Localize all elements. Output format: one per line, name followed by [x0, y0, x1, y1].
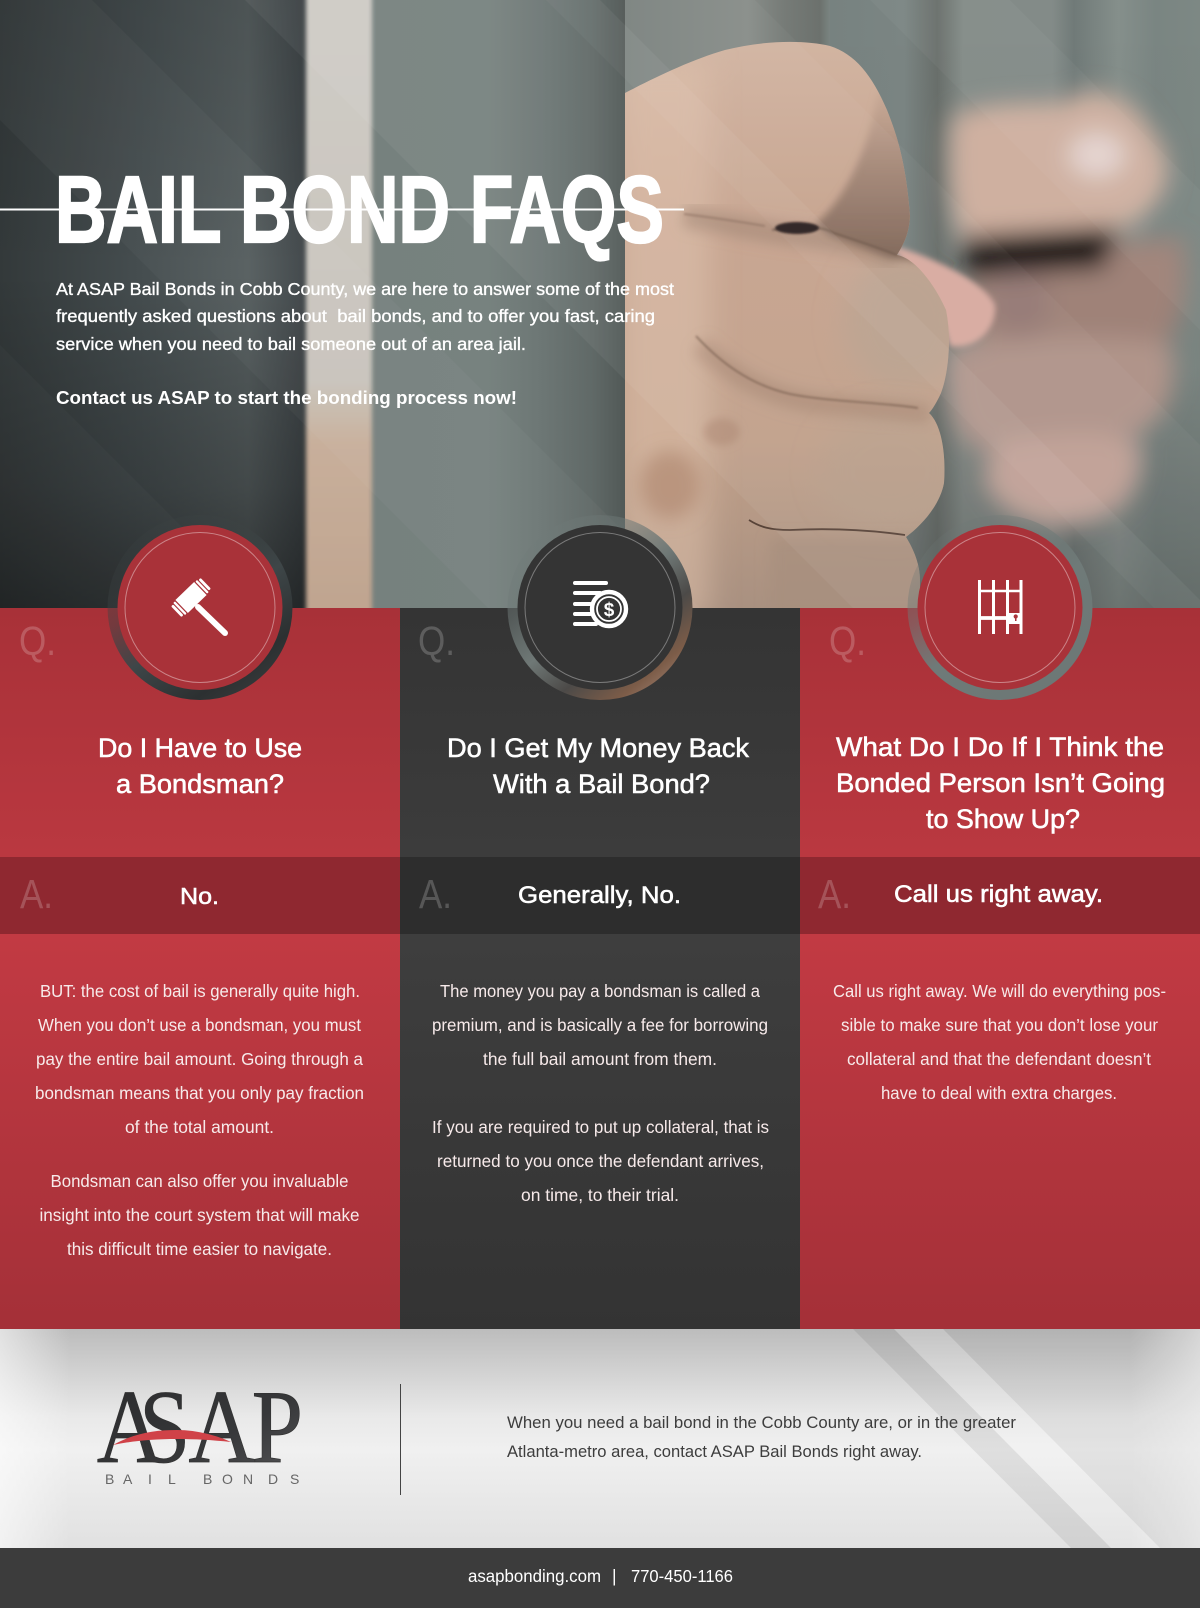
question 1 heading: a Bondsman? [116, 769, 284, 799]
body text column 1: bondsman means that you only pay fraction [35, 1083, 364, 1103]
body text column 2: on time, to their trial. [521, 1185, 679, 1205]
intro text: At ASAP Bail Bonds in Cobb County, we are here to answer some of the most [56, 279, 674, 299]
footer statement: When you need a bail bond in the Cobb County are, or in the greater [507, 1413, 1016, 1432]
call to action: Contact us ASAP to start the bonding process now! [56, 388, 517, 408]
question 2 heading [447, 733, 750, 799]
logo: ASAP Bail Bonds: A [188, 1370, 255, 1485]
contact bar: asapbonding.com [468, 1566, 601, 1586]
panel: question 1 [0, 608, 400, 1329]
answer band 1 [0, 857, 400, 934]
panel: question 3 [800, 608, 1200, 1329]
contact bar [0, 1548, 1200, 1608]
question 3 heading [836, 732, 1165, 834]
Q marks [19, 618, 866, 664]
A marks: A. [20, 871, 53, 917]
icon: jail cell door [979, 580, 1022, 634]
body text column 1: this difficult time easier to navigate. [67, 1239, 332, 1259]
logo tagline: L [168, 1471, 176, 1487]
question 3 heading: Bonded Person Isn’t Going [836, 768, 1165, 798]
body text column 1 [35, 981, 364, 1259]
icon badge: gavel [108, 515, 292, 700]
body text column 2: If you are required to put up collateral, that is [432, 1117, 769, 1137]
icon: stack of coins: $ [604, 600, 615, 621]
intro text: service when you need to bail someone out of an area jail. [56, 334, 526, 354]
question 2 heading: With a Bail Bond? [493, 769, 710, 799]
body text column 3: Call us right away. We will do everything pos- [833, 981, 1166, 1001]
body text column 1: Bondsman can also offer you invaluable [50, 1171, 348, 1191]
intro text: frequently asked questions about bail bonds, and to offer you fast, caring [56, 306, 655, 326]
answer body background 2 [400, 934, 800, 1329]
logo: ASAP Bail Bonds: S [139, 1370, 190, 1485]
body text column 1: When you don’t use a bondsman, you must [38, 1015, 361, 1035]
logo: ASAP Bail Bonds [97, 1370, 303, 1487]
vertical divider [400, 1384, 401, 1495]
logo tagline: A [123, 1471, 133, 1487]
logo: ASAP Bail Bonds: A [97, 1370, 164, 1485]
blurred far hand [948, 92, 1186, 526]
logo tagline: N [243, 1471, 253, 1487]
body text column 1: BUT: the cost of bail is generally quite high. [40, 981, 360, 1001]
body text column 3 [833, 981, 1166, 1103]
Q marks: Q. [19, 618, 56, 664]
footer statement: Atlanta-metro area, contact ASAP Bail Bonds right away. [507, 1442, 922, 1461]
hero photo: fist gripping jail bars [0, 0, 1200, 654]
logo tagline: I [148, 1471, 152, 1487]
title: BAIL BOND FAQS [55, 157, 664, 263]
body text column 1: insight into the court system that will make [40, 1205, 360, 1225]
question 2 heading: Do I Get My Money Back [447, 733, 750, 763]
answer body background 1 [0, 934, 400, 1329]
body text column 2: returned to you once the defendant arrives, [437, 1151, 764, 1171]
A marks [20, 871, 851, 917]
answer band 3 [800, 857, 1200, 934]
answer 3: Call us right away. [894, 881, 1103, 908]
icon: stack of coins [575, 583, 626, 626]
body text column 3: have to deal with extra charges. [881, 1083, 1117, 1103]
body text column 3: collateral and that the defendant doesn’t [847, 1049, 1151, 1069]
answer 2: Generally, No. [518, 882, 681, 909]
Q marks: Q. [829, 618, 866, 664]
Q marks: Q. [418, 618, 455, 664]
logo red swoosh [113, 1430, 231, 1445]
contact bar: 770-450-1166 [631, 1566, 733, 1586]
intro text [56, 279, 674, 354]
logo tagline: B [105, 1471, 114, 1487]
question 1 heading: Do I Have to Use [98, 733, 302, 763]
answer band 2 [400, 857, 800, 934]
main fist [620, 35, 967, 620]
footer statement [507, 1413, 1016, 1461]
A marks: A. [818, 871, 851, 917]
question 3 heading: What Do I Do If I Think the [836, 732, 1164, 762]
icon: gavel [170, 577, 225, 633]
body text column 2: the full bail amount from them. [483, 1049, 717, 1069]
logo tagline: O [222, 1471, 233, 1487]
answer 1: No. [180, 883, 219, 909]
A marks: A. [419, 871, 452, 917]
icon badge: money [508, 515, 692, 700]
body text column 1: pay the entire bail amount. Going through a [36, 1049, 363, 1069]
logo tagline: S [290, 1471, 299, 1487]
question 3 heading: to Show Up? [926, 804, 1080, 834]
question 1 heading [98, 733, 302, 799]
logo: ASAP Bail Bonds: P [252, 1370, 303, 1485]
body text column 1: of the total amount. [125, 1117, 274, 1137]
panel: question 2 [400, 608, 800, 1329]
contact bar: | [612, 1566, 617, 1586]
icon badge: jail door [908, 515, 1092, 700]
diagonal light overlays [246, 0, 1200, 608]
footer info panel [0, 1329, 1200, 1548]
body text column 2: premium, and is basically a fee for borrowing [432, 1015, 768, 1035]
blurred fingertip [890, 245, 995, 347]
body text column 2 [432, 981, 769, 1205]
logo tagline: D [268, 1471, 278, 1487]
body text column 3: sible to make sure that you don’t lose your [841, 1015, 1158, 1035]
logo tagline: B [203, 1471, 212, 1487]
body text column 2: The money you pay a bondsman is called a [440, 981, 760, 1001]
answer body background 3 [800, 934, 1200, 1329]
